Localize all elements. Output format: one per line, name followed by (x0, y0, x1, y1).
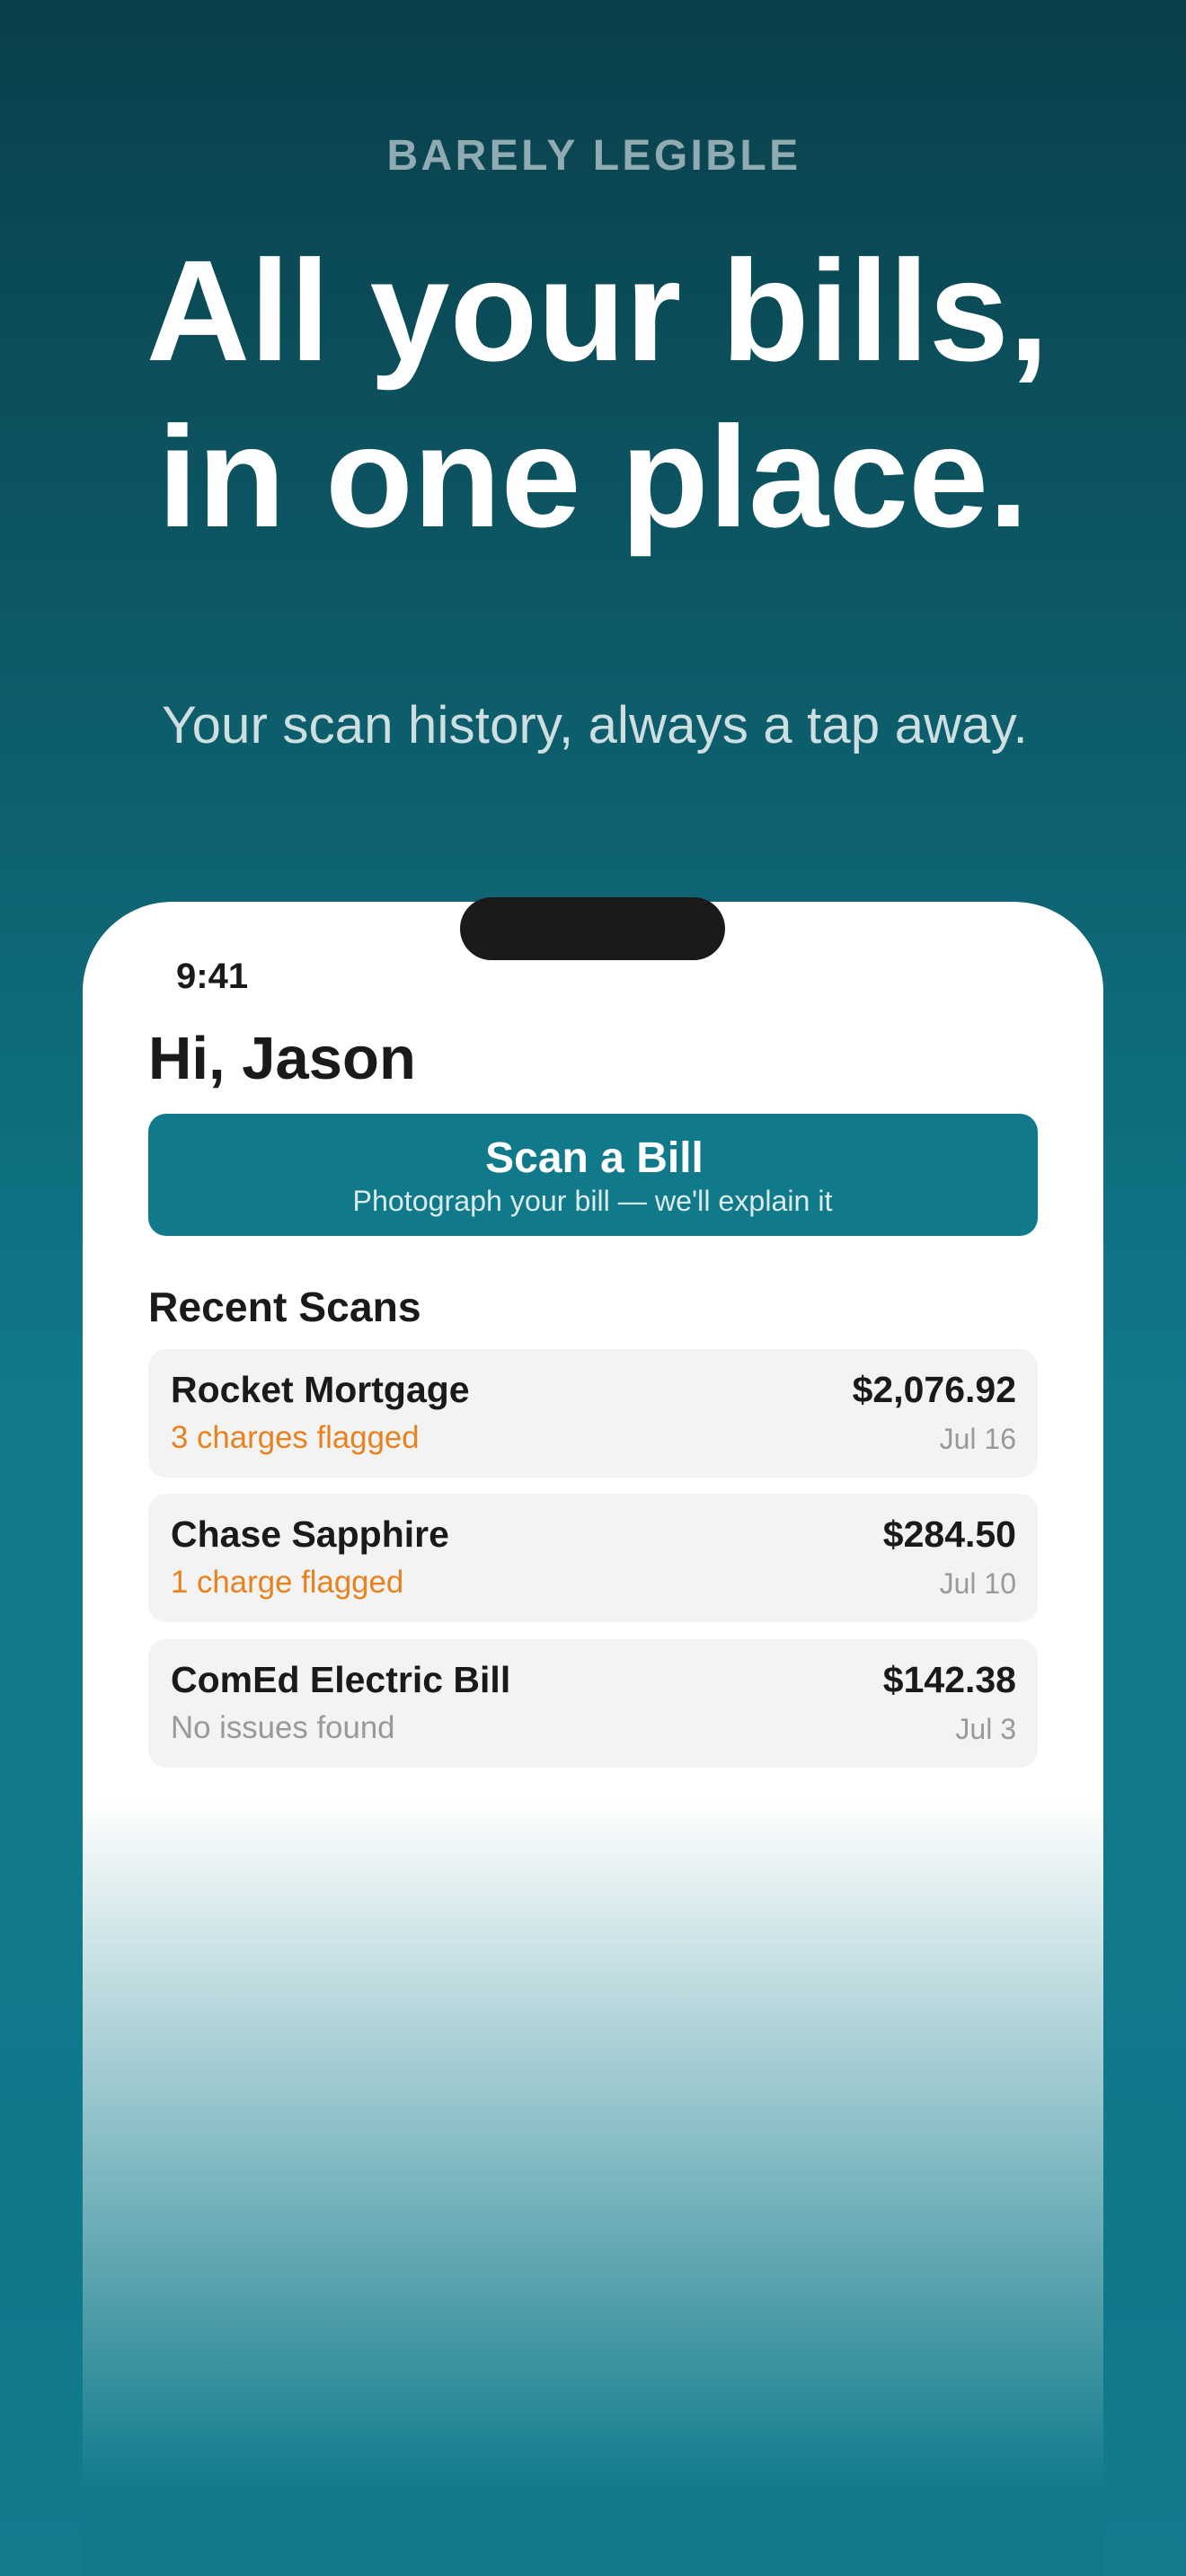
amount: $142.38 (883, 1659, 1016, 1700)
button subtitle: Photograph your bill — we'll explain it (353, 1185, 832, 1217)
title: All your bills, (146, 230, 1049, 391)
greeting: Hi, Jason (148, 1025, 416, 1092)
card: ComEd Electric Bill (148, 1639, 1038, 1768)
flag status: 1 charge flagged (171, 1565, 403, 1600)
flag status: No issues found (171, 1710, 395, 1745)
date: Jul 10 (940, 1567, 1016, 1600)
merchant name: ComEd Electric Bill (171, 1659, 510, 1700)
merchant name: Rocket Mortgage (171, 1369, 470, 1410)
section heading: recent scans: Recent Scans (148, 1284, 421, 1330)
amount: $284.50 (883, 1513, 1016, 1555)
phone mockup (83, 902, 1103, 2576)
flag status: 3 charges flagged (171, 1420, 420, 1455)
date: Jul 16 (940, 1423, 1016, 1455)
card: Rocket Mortgage (148, 1349, 1038, 1478)
date: Jul 3 (955, 1713, 1016, 1745)
eyebrow: app name: BARELY LEGIBLE (386, 132, 801, 180)
button title: Scan a Bill (485, 1134, 704, 1182)
title: in one place. (157, 395, 1029, 557)
button: scan a bill (148, 1114, 1038, 1236)
title (146, 230, 1049, 557)
subtitle: Your scan history, always a tap away. (162, 696, 1028, 754)
status bar time: 9:41 (176, 957, 248, 996)
fade overlay (83, 1800, 1103, 2576)
amount: $2,076.92 (853, 1369, 1016, 1410)
dynamic island (460, 897, 725, 960)
card: Chase Sapphire (148, 1494, 1038, 1622)
merchant name: Chase Sapphire (171, 1513, 449, 1555)
